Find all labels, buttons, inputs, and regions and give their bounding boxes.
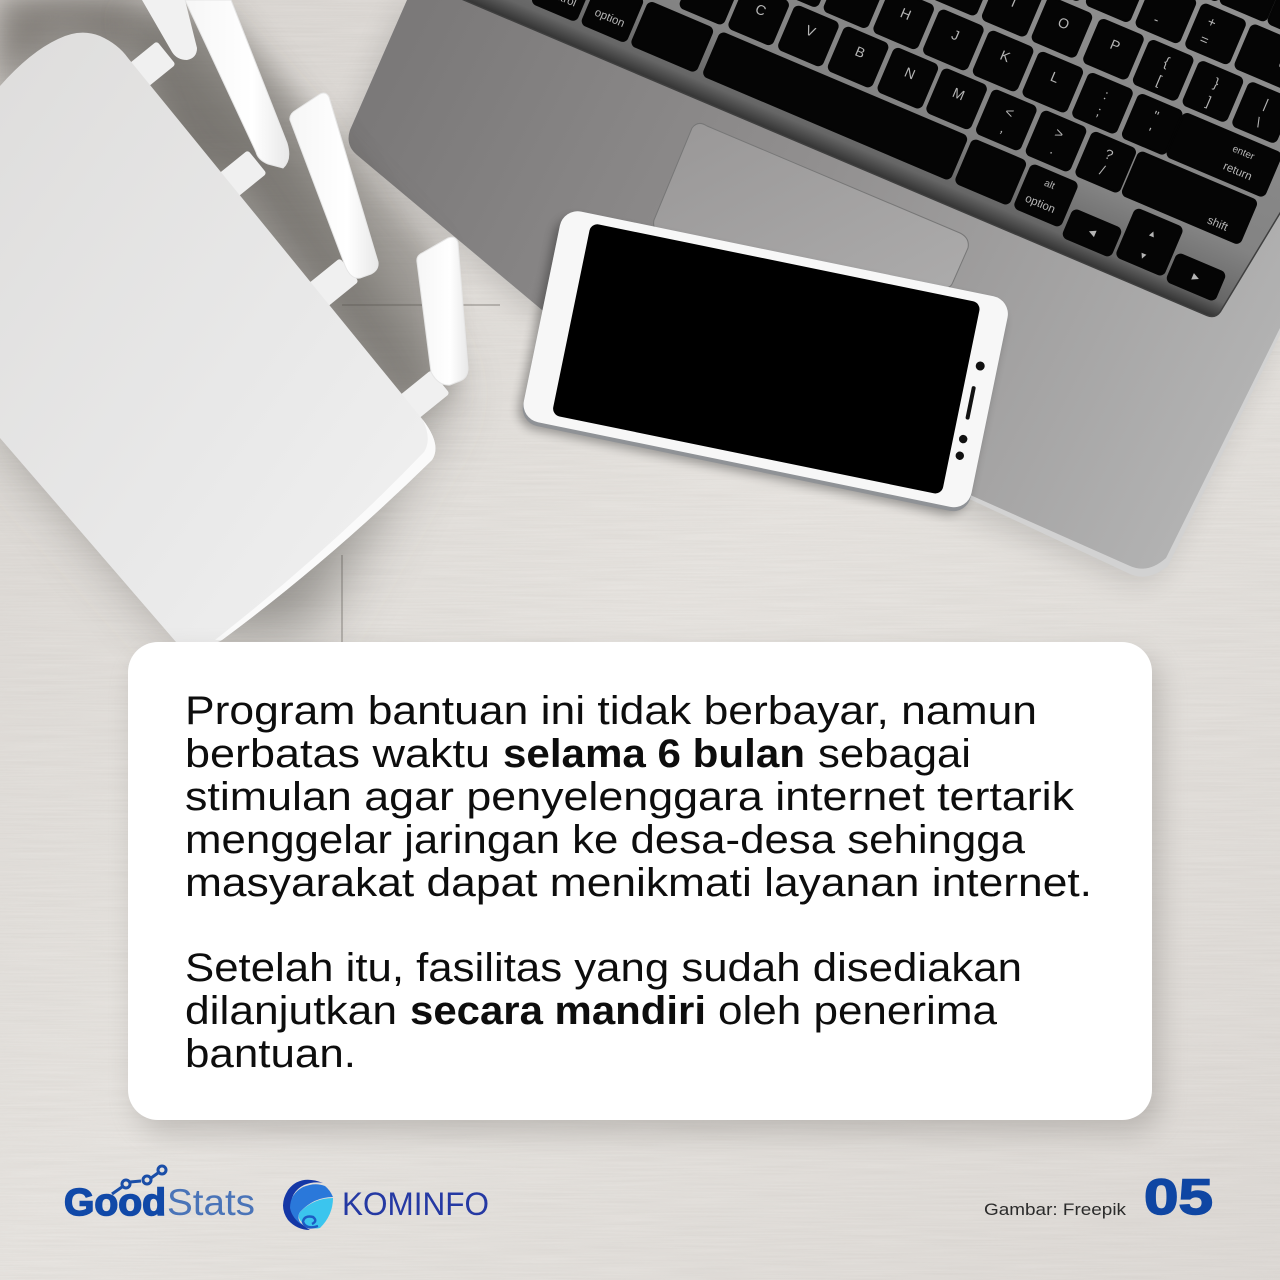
paragraph 1: stimulan agar penyelenggara internet tertarik [185,775,1075,819]
key labels: ◀ [1087,226,1098,238]
bottom letter key row [679,0,1258,244]
paragraph 2: dilanjutkan [185,989,397,1033]
key labels: K [998,47,1013,65]
number key row [837,0,1280,102]
key labels: L [1048,68,1062,86]
key labels: : [1101,86,1111,103]
paragraph 2: oleh penerima [718,989,998,1033]
paragraph 2: Setelah itu, fasilitas yang sudah disediakan [185,946,1022,990]
key labels: ▲ [1146,227,1159,240]
arrow keys [1062,186,1236,301]
key labels: B [853,43,868,61]
key labels: " [1150,107,1161,124]
key labels: enter [1231,144,1256,163]
key labels: = [1198,31,1211,48]
key labels [538,0,1280,292]
Kominfo logo [283,1180,489,1230]
antennas [124,0,468,420]
paragraph 2 [185,946,1022,1076]
key labels: < [1003,103,1017,121]
key labels: . [1048,141,1058,157]
phone screen [552,223,981,495]
paragraph 1: berbatas waktu [185,732,490,776]
antenna connectors [124,41,450,420]
paragraph 1: Program bantuan ini tidak berbayar, namun [185,689,1037,733]
key labels: J [949,26,962,44]
top letter key row [783,0,1280,143]
key labels: > [1052,124,1066,142]
keyboard [307,0,1280,341]
key labels: H [898,4,914,23]
key labels: | [1262,96,1271,112]
wifi router [0,0,468,644]
text card [128,642,1152,1120]
Kominfo logo: KOMINFO [342,1186,489,1222]
paragraph 2: bantuan. [185,1032,356,1076]
space bar row [531,0,1078,227]
key labels: \ [1254,114,1264,130]
GoodStats logo: Stats [167,1182,255,1223]
paragraph 1: sebagai [818,732,971,776]
key labels: alt [1042,178,1057,192]
logo chart line icon [112,1166,166,1194]
laptop [307,0,1280,583]
key labels: shift [1205,215,1230,234]
paragraph 2: secara mandiri [410,989,706,1033]
home key row [724,0,1280,197]
key labels: ] [1204,93,1214,109]
trackpad [654,123,968,288]
GoodStats logo: Good [64,1182,166,1224]
key labels: N [902,64,918,82]
key labels: C [753,0,769,19]
paragraph 1: selama 6 bulan [503,732,805,776]
key labels: ' [1145,124,1153,140]
text card shadow [136,656,1160,1132]
router body [0,33,435,644]
key labels: ; [1094,103,1104,119]
key labels: { [1162,53,1172,70]
image credit: Gambar: Freepik [984,1201,1127,1219]
paragraph 1 [185,689,1092,905]
smartphone [515,207,1011,518]
key labels: } [1211,74,1222,91]
key labels: [ [1154,72,1164,88]
paragraph 1: menggelar jaringan ke desa-desa sehingga [185,818,1026,862]
key labels: ▼ [1137,249,1149,262]
key labels: + [1205,13,1219,31]
key labels: / [1097,162,1107,178]
key labels: ▶ [1191,271,1201,283]
page number: 05 [1144,1169,1213,1225]
Kominfo emblem [283,1180,333,1230]
key labels: V [803,22,819,40]
function key row [980,0,1280,42]
key labels: ? [1102,145,1116,163]
key labels: P [1108,36,1123,54]
key labels: O [1056,14,1072,33]
phone sensors [955,360,986,461]
key labels: return [1221,160,1254,183]
key labels: , [998,120,1008,136]
key labels: option [593,7,626,30]
key labels: - [1151,11,1162,28]
paragraph 1: masyarakat dapat menikmati layanan internet. [185,861,1092,905]
key labels: option [1023,193,1057,216]
GoodStats logo [64,1166,255,1224]
key labels: M [950,84,967,103]
